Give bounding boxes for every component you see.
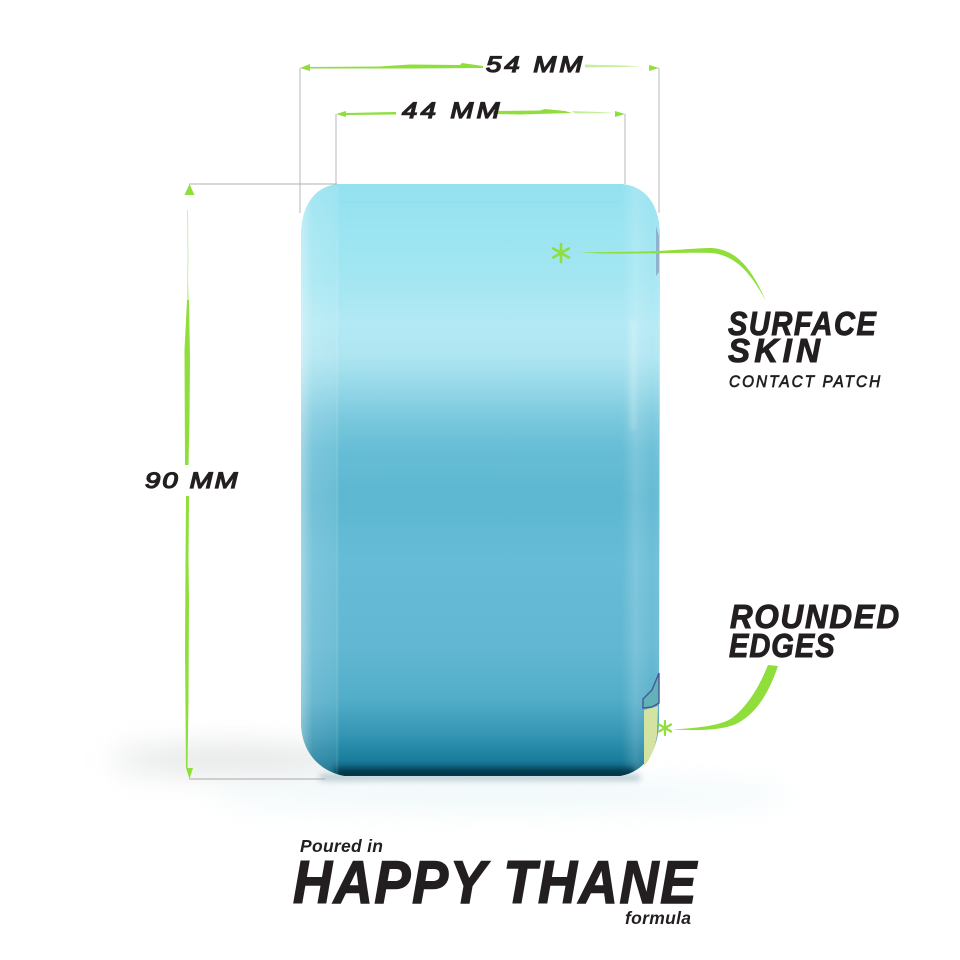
heading: surface skin: SURFACE: [728, 305, 877, 342]
text: formula: formula: [625, 908, 691, 928]
callout line: [580, 248, 766, 301]
label: 44 mm: 44 MM: [402, 99, 500, 123]
callout: surface skin: SKIN: [728, 332, 821, 369]
callout: rounded edges: [659, 598, 899, 735]
printed yellow graphic at lower right: [644, 706, 658, 766]
heading: rounded edges: ROUNDED: [730, 598, 899, 635]
icon: green asterisk: [553, 244, 569, 262]
printed label peeking at right edge: [656, 226, 659, 276]
label: 54 mm: 54 MM: [486, 53, 583, 77]
callout line: [672, 665, 778, 730]
wheel shading: [301, 184, 660, 780]
dimension: 54 mm: [300, 53, 659, 213]
callout: rounded edges: EDGES: [729, 627, 835, 664]
subheading: contact patch: CONTACT PATCH: [729, 372, 881, 391]
callout: surface skin: [553, 244, 881, 391]
dimension: 44 mm: [336, 99, 625, 184]
text: happy thane: HAPPY THANE: [293, 849, 698, 917]
dimension: 90 mm: [145, 184, 337, 779]
label: 90 mm: 90 MM: [145, 469, 238, 493]
formula title block: [293, 836, 698, 928]
wheel body: [301, 184, 660, 776]
text: poured in: Poured in: [300, 836, 383, 856]
icon: green asterisk: [659, 721, 671, 735]
wheel: [301, 184, 660, 780]
ground shadow: [110, 745, 790, 807]
